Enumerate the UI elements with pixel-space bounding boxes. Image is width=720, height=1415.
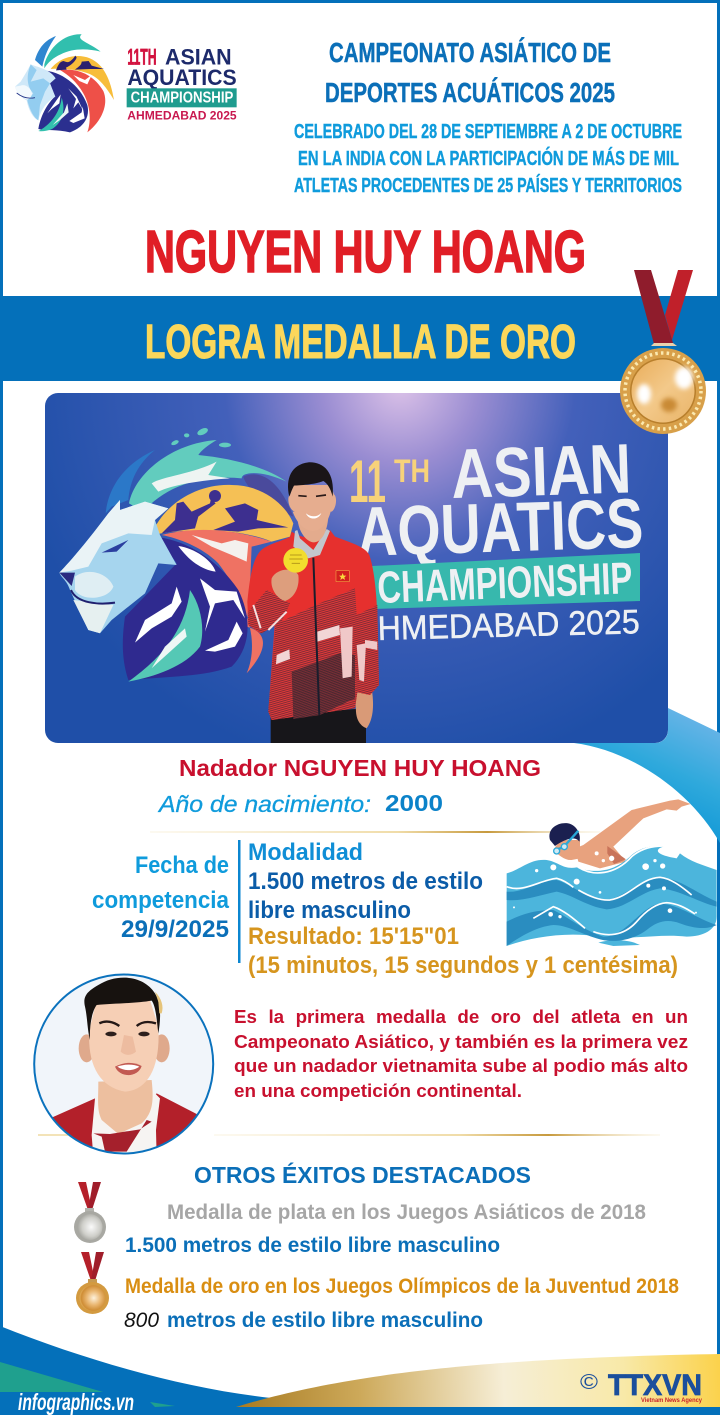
athlete figure [247, 462, 379, 745]
photo banner lettering: 11 [349, 448, 386, 515]
text: event and result: Modalidad [248, 839, 363, 866]
text: silver medal achievement: Medalla de plata en los Juegos Asiáticos de 2018 [167, 1201, 646, 1224]
logo: TTXVN news agency: Vietnam News Agency [641, 1398, 703, 1404]
text: competition date: competencia [92, 887, 230, 914]
text: birth year [157, 790, 443, 817]
text block: achievement description: Campeonato Asiático, y también es la primera vez [234, 1032, 688, 1052]
heading: championship title [325, 37, 615, 108]
text: event and result: (15 minutos, 15 segundos y 1 centésima) [248, 952, 678, 979]
text: gold medal achievement: 800 [124, 1309, 159, 1332]
photo banner lettering [351, 444, 642, 640]
text: birth year: 2000 [385, 790, 443, 816]
text: competition date [92, 852, 230, 943]
text: silver medal achievement [125, 1201, 646, 1257]
logo: 11th Asian Aquatics Championship [15, 34, 237, 132]
logo: TTXVN news agency: TTXVN [608, 1369, 702, 1402]
logo: 11th Asian Aquatics Championship: CHAMPIONSHIP [131, 90, 233, 107]
text block: event description [294, 121, 682, 197]
photo banner lettering: AQUATICS [356, 484, 644, 571]
decorative ribbon: right side blue swoosh [574, 708, 720, 843]
footer: site name: infographics.vn [18, 1389, 134, 1415]
portrait: athlete headshot [34, 974, 214, 1157]
text block: achievement description: en una competición continental. [234, 1081, 522, 1101]
text: competition date: Fecha de [135, 852, 229, 879]
text block: achievement description: Es la primera medalla de oro del atleta en un [234, 1007, 688, 1027]
text: gold medal achievement: metros de estilo libre masculino [167, 1309, 483, 1332]
text: birth year: Año de nacimiento: [157, 791, 371, 817]
text: event and result: 1.500 metros de estilo [248, 868, 483, 895]
text: competition date: 29/9/2025 [121, 916, 229, 943]
text: gold medal achievement: Medalla de oro en los Juegos Olímpicos de la Juventud 2018 [125, 1275, 679, 1298]
logo: 11th Asian Aquatics Championship: 11TH [127, 44, 157, 69]
text: silver medal achievement: 1.500 metros de estilo libre masculino [125, 1234, 500, 1257]
heading: other achievements: OTROS ÉXITOS DESTACADOS [194, 1161, 531, 1188]
logo: 11th Asian Aquatics Championship: AHMEDABAD 2025 [127, 110, 237, 123]
photo lion logo [59, 427, 293, 682]
photo: athlete at the championship banner [45, 393, 668, 745]
heading: championship title: CAMPEONATO ASIÁTICO DE [329, 37, 611, 68]
text block: achievement description: que un nadador vietnamita sube al podio más alto [234, 1056, 688, 1076]
heading: swimmer name: Nadador NGUYEN HUY HOANG [179, 755, 541, 781]
photo banner lettering: HMEDABAD 2025 [377, 603, 640, 648]
text: event and result: Resultado: 15'15"01 [248, 923, 459, 950]
text block: achievement description [234, 1007, 688, 1101]
logo: 11th Asian Aquatics Championship: ASIAN [165, 44, 232, 69]
heading: championship title: DEPORTES ACUÁTICOS 2025 [325, 77, 615, 108]
text: event and result [248, 839, 678, 979]
footer: gold wave [236, 1354, 720, 1407]
text: gold medal achievement [124, 1275, 679, 1332]
banner: gold medal headline [0, 296, 720, 381]
logo: 11th Asian Aquatics Championship: AQUATICS [127, 65, 237, 90]
footer: blue wave [0, 1326, 720, 1415]
text: event and result: libre masculino [248, 897, 411, 924]
icon: gold medal small [76, 1252, 109, 1314]
photo banner lettering: CHAMPIONSHIP [376, 552, 633, 613]
photo banner lettering: ASIAN [450, 429, 632, 513]
illustration: swimmer in waves [507, 799, 717, 946]
icon: large gold medal [620, 270, 706, 434]
logo: TTXVN news agency: © [580, 1371, 599, 1394]
photo banner lettering: TH [394, 453, 430, 489]
icon: silver medal [74, 1182, 106, 1243]
